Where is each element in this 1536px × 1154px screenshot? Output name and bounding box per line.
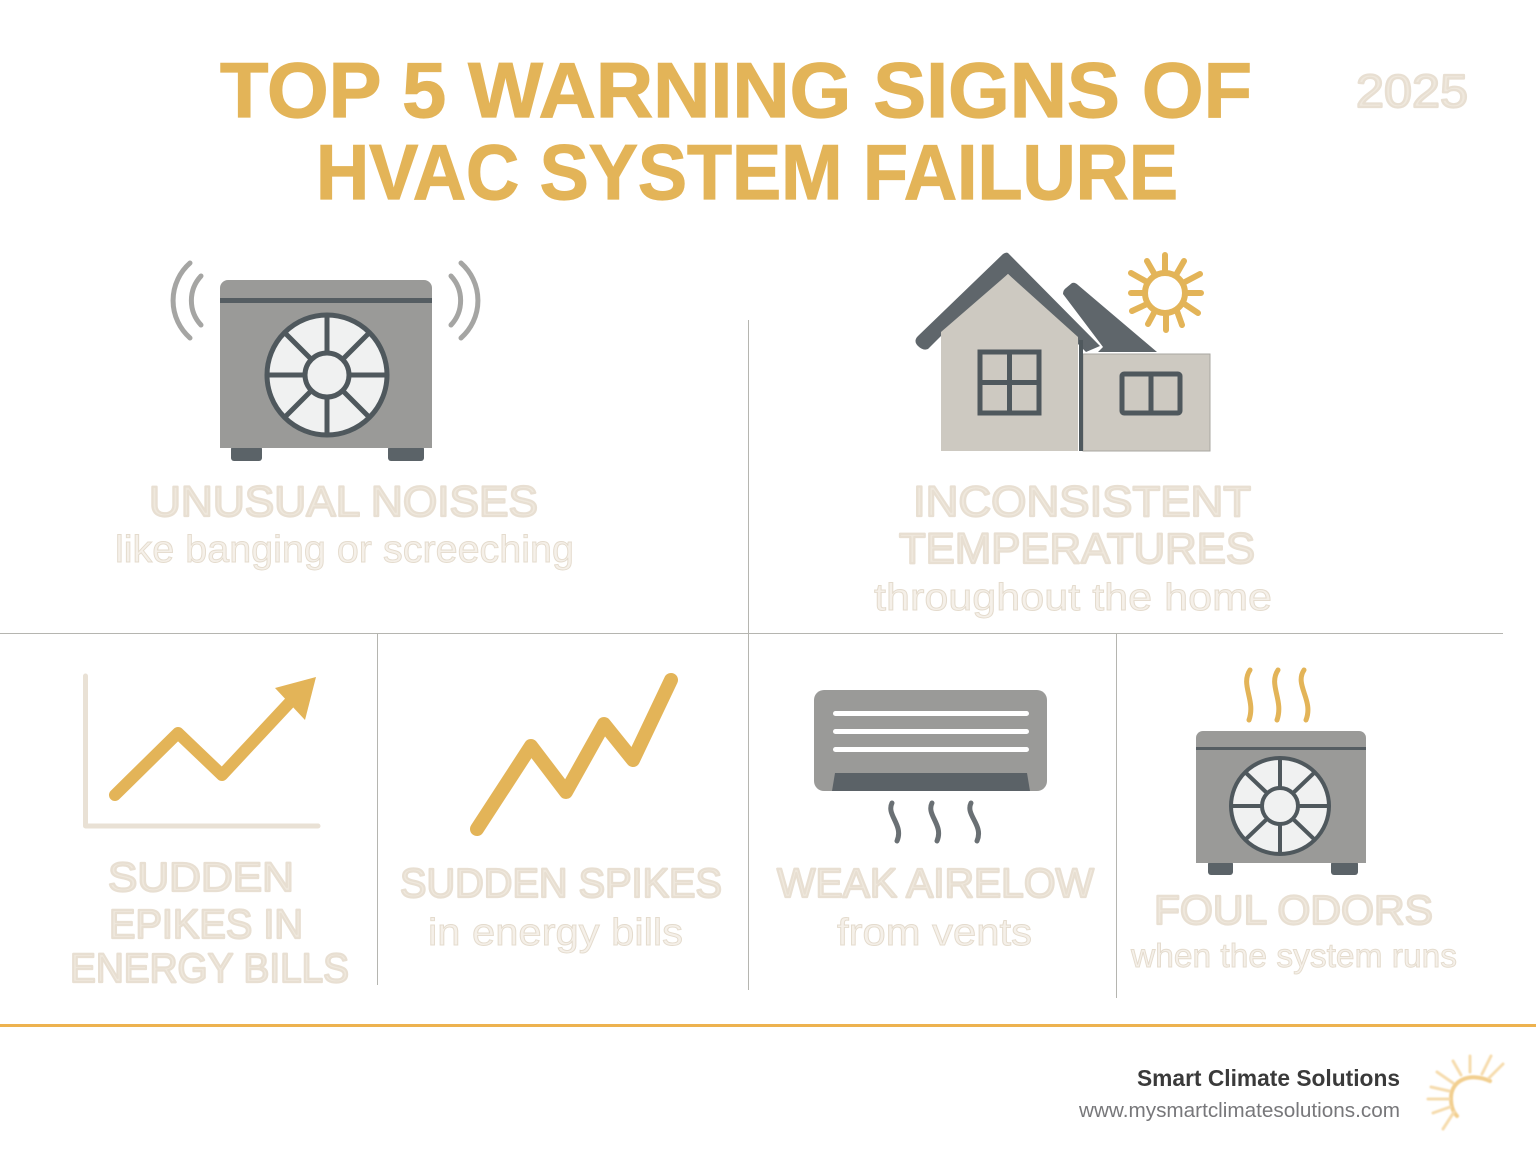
icon: rising chart with arrow <box>86 676 318 826</box>
footer brand <box>1078 1056 1503 1129</box>
title <box>220 46 1252 216</box>
text: throughout the home: throughout the home <box>874 577 1272 619</box>
brand name: Smart Climate Solutions <box>1137 1065 1400 1091</box>
icon: house and sun <box>916 253 1210 451</box>
footer rule <box>0 1024 1536 1027</box>
panel: sudden epikes in energy bills <box>70 676 349 991</box>
heading: inconsistent temperatures: INCONSISTENT <box>913 478 1251 526</box>
panel: weak airflow <box>777 690 1094 954</box>
year label: 2025 <box>1356 65 1468 117</box>
panel: foul odors <box>1130 670 1457 974</box>
icon: outdoor unit with odor waves <box>1196 670 1366 875</box>
icon: spiking line <box>477 680 671 829</box>
heading: foul odors: FOUL ODORS <box>1154 887 1433 933</box>
heading: weak airelow: WEAK AIRELOW <box>777 860 1094 906</box>
heading: sudden epikes in energy bills: EPIKES IN <box>109 901 303 947</box>
icon: outdoor unit with sound waves <box>173 263 478 461</box>
heading: sudden spikes: SUDDEN SPIKES <box>400 860 722 906</box>
icon: sun logo <box>1428 1056 1503 1129</box>
heading: sudden epikes in energy bills: SUDDEN <box>108 854 294 900</box>
text: from vents: from vents <box>837 912 1032 954</box>
heading: inconsistent temperatures: TEMPERATURES <box>899 525 1255 573</box>
text: in energy bills: in energy bills <box>428 912 683 954</box>
website: www.mysmartclimatesolutions.com <box>1078 1100 1400 1122</box>
heading: unusual noises: UNUSUAL NOISES <box>149 478 538 526</box>
text: like banging or screeching: like banging or screeching <box>115 529 574 571</box>
heading: sudden epikes in energy bills <box>70 854 349 991</box>
icon: wall unit with faint air <box>814 690 1047 841</box>
title: HVAC SYSTEM FAILURE <box>316 128 1178 216</box>
text: when the system runs: when the system runs <box>1130 937 1457 974</box>
heading: sudden epikes in energy bills: ENERGY BILLS <box>70 945 349 991</box>
panel: inconsistent temperatures <box>874 253 1272 619</box>
panel: unusual noises <box>115 263 574 571</box>
panel: sudden spikes <box>400 680 722 954</box>
heading: inconsistent temperatures <box>899 478 1255 573</box>
title: TOP 5 WARNING SIGNS OF <box>220 46 1252 134</box>
